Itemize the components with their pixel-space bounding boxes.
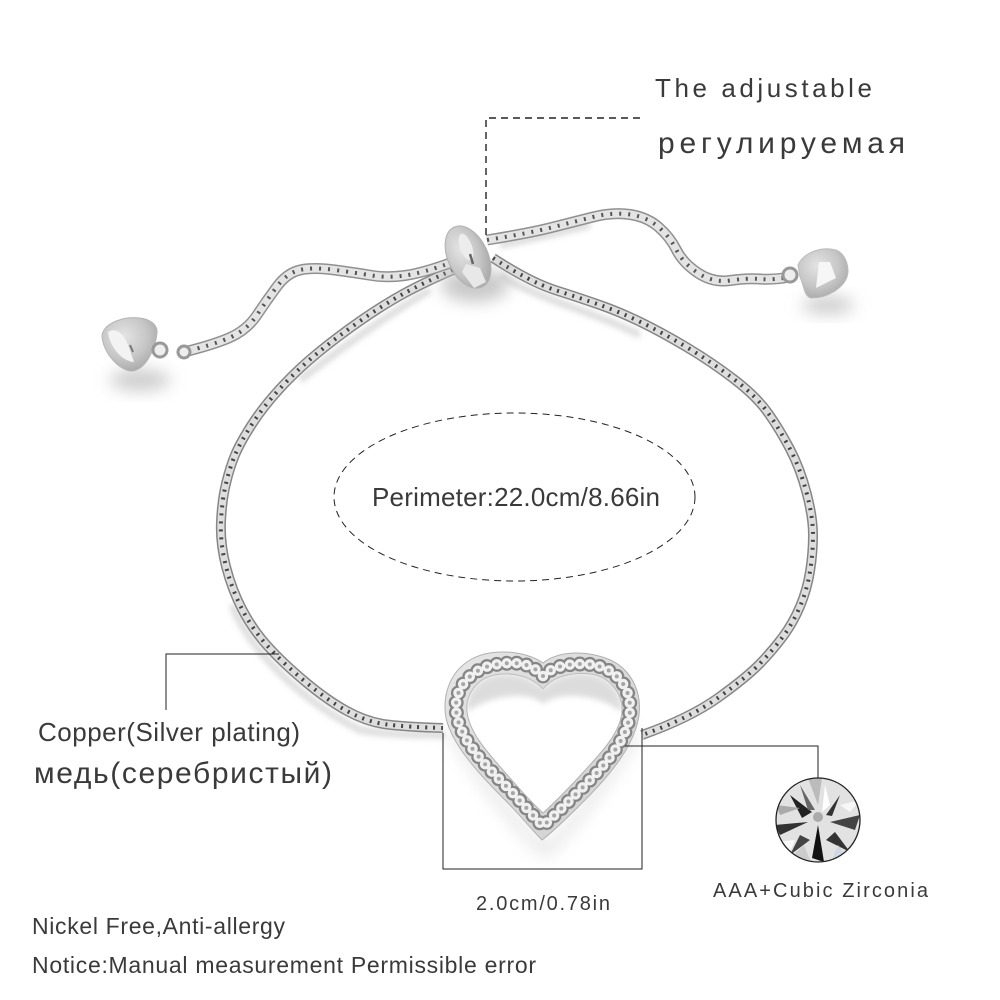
heart ring xyxy=(445,652,639,840)
label: material in Russian: медь(серебристый) xyxy=(34,757,332,790)
perimeter ellipse xyxy=(334,413,695,581)
heart pendant xyxy=(445,652,639,852)
size bracket around heart xyxy=(443,728,642,869)
label: heart size: 2.0cm/0.78in xyxy=(476,893,610,915)
icon: right heart charm xyxy=(783,249,854,314)
label: the adjustable: The adjustable xyxy=(655,73,872,103)
inner glow xyxy=(467,674,622,712)
icon: left heart charm xyxy=(102,318,190,391)
heart shadow xyxy=(452,730,636,852)
callout line: adjustable xyxy=(486,118,640,240)
callout line: stone xyxy=(625,746,818,780)
note: nickel free: Nickel Free,Anti-allergy xyxy=(32,913,286,939)
label: perimeter: Perimeter:22.0cm/8.66in xyxy=(372,482,660,512)
chain shadows xyxy=(232,225,640,735)
label: material: Copper(Silver plating) xyxy=(38,717,300,747)
pave stones xyxy=(456,663,630,826)
callout line: material xyxy=(166,654,279,710)
bracelet chain xyxy=(180,214,813,735)
icon: zirconia stone xyxy=(775,778,860,865)
label: adjustable in Russian: регулируемая xyxy=(658,127,905,160)
icon: slider bead xyxy=(436,219,509,302)
note: measurement notice: Notice:Manual measurement Permissible error xyxy=(32,952,536,978)
label: stone: AAA+Cubic Zirconia xyxy=(713,880,929,902)
